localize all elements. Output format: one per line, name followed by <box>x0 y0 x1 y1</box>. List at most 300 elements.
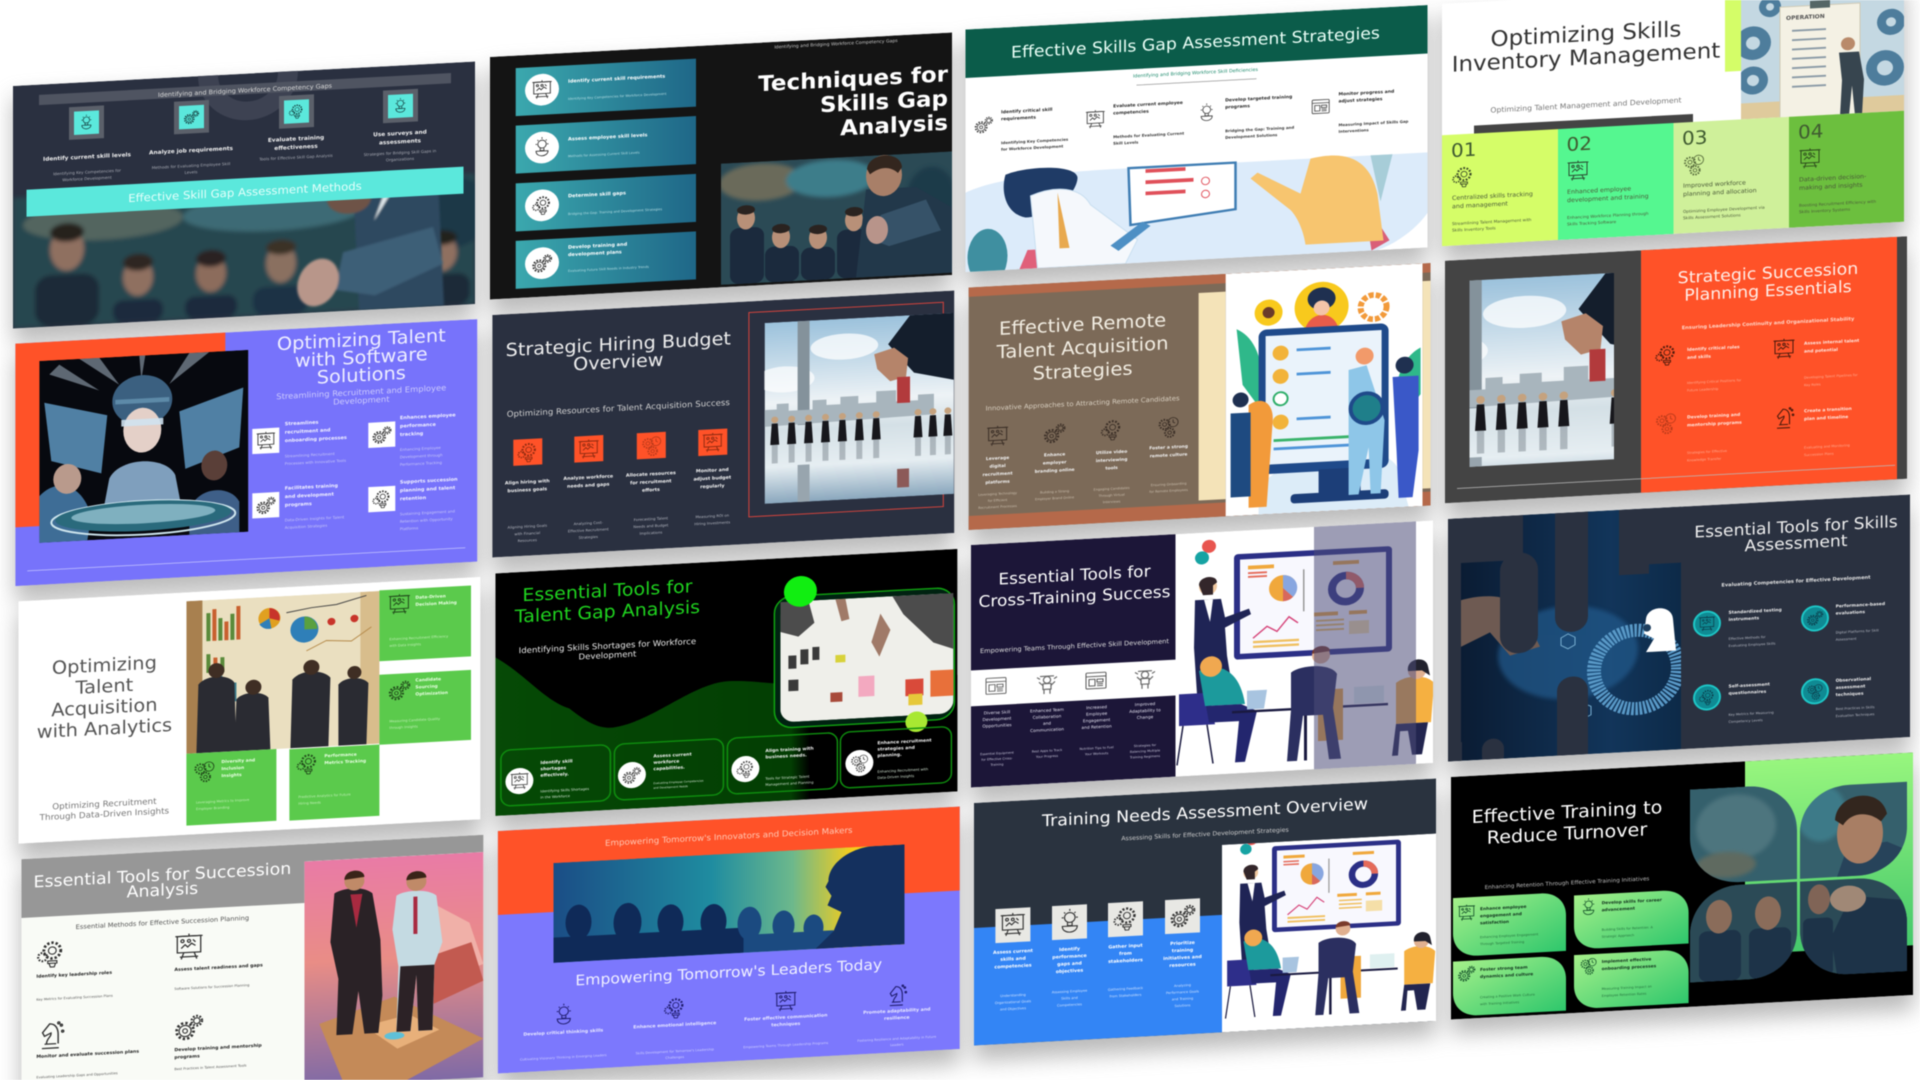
title: Techniques for <box>758 62 948 97</box>
four technique cards: Identify current skill requirements <box>568 74 665 85</box>
four capability items: Supports succession <box>400 478 458 486</box>
translucent overlay panel <box>1314 521 1416 769</box>
four capability cards: shortages <box>540 765 567 772</box>
four method items: Software Solutions for Succession Planning <box>174 983 249 991</box>
four leadership items: Foster effective communication <box>744 1013 827 1023</box>
green capability panels: Leveraging Metrics to Improve <box>196 798 249 805</box>
four strategy columns: Leverage <box>986 456 1009 462</box>
slide: Effective Remote Talent Acquisition Strategies <box>969 263 1431 530</box>
slide: Effective Training to Reduce Turnover <box>1451 753 1913 1020</box>
title: Talent Acquisition <box>996 333 1169 363</box>
four budget steps: Monitor and <box>696 468 729 474</box>
four strategy columns: Employer Brand Online <box>1035 495 1074 501</box>
title: Optimizing <box>52 653 157 679</box>
four strategy items: Skill Levels <box>1113 140 1139 146</box>
four method cards: assessments <box>379 138 422 146</box>
title: Strategic Hiring Budget <box>506 329 731 361</box>
four assessment steps: skills and <box>1000 956 1026 963</box>
title: Skills Gap <box>820 86 948 118</box>
four capability items: Retention with Opportunity <box>400 517 454 524</box>
slide: Strategic Succession Planning Essentials <box>1414 236 1907 506</box>
four strategy columns: Building a Strong <box>1040 489 1069 495</box>
title: Strategies <box>1033 358 1133 385</box>
four capability items <box>252 412 458 539</box>
subtitle: Ensuring Leadership Continuity and Organizational Stability <box>1682 316 1855 331</box>
slide: Optimizing Talent Acquisition with Analytics <box>18 577 480 844</box>
four leadership items <box>520 983 936 1068</box>
four strategy columns: Ensuring Onboarding <box>1151 482 1186 487</box>
four assessment steps: stakeholders <box>1108 957 1143 965</box>
four succession items: Key Roles <box>1804 382 1821 387</box>
image: leader silhouette with crowd <box>552 844 906 964</box>
slide: Essential Tools for Cross-Training Success <box>971 520 1434 788</box>
subtitle: Identifying and Bridging Workforce Skill Deficiencies <box>1133 67 1259 79</box>
four technique cards: development plans <box>568 249 622 258</box>
four capability cards: in the Workforce <box>540 794 570 800</box>
four budget steps <box>505 428 732 544</box>
title: Assessment <box>1744 531 1848 555</box>
subtitle: Essential Methods for Effective Succession Planning <box>76 914 249 931</box>
four numbered benefit cards: Optimizing Employee Development via <box>1683 205 1765 214</box>
four method cards: Evaluate training <box>268 135 324 144</box>
four benefit columns: and Retention <box>1082 724 1112 730</box>
illustration: team presentation <box>1177 528 1434 767</box>
subtitle band <box>39 73 451 105</box>
four capability cards: Evaluating Employee Competencies <box>653 779 703 785</box>
four leadership items: Fostering Resilience and Adaptability in Future <box>857 1035 936 1043</box>
slide: Strategic Hiring Budget Overview <box>492 291 954 558</box>
four leadership items: Develop critical thinking skills <box>523 1028 604 1038</box>
four benefit columns: for Effective Cross- <box>981 756 1013 762</box>
four numbered benefit cards: Streamlining Talent Management with <box>1452 217 1531 226</box>
green capability panels: Metrics Tracking <box>324 758 366 766</box>
four budget steps: Analyzing Cost- <box>574 521 603 526</box>
four assessment steps <box>993 898 1202 1018</box>
four capability items: tracking <box>400 431 424 438</box>
four capability items: and development <box>285 492 335 500</box>
subtitle: Optimizing Talent Management and Development <box>1490 96 1682 115</box>
subtitle: Development <box>333 394 390 407</box>
four succession items: Knowledge Transfer <box>1687 457 1722 462</box>
green capability panels: Data-Driven <box>415 594 446 601</box>
four capability cards <box>501 726 951 806</box>
four initiative cards: Through Targeted Training <box>1479 940 1524 946</box>
four assessment tools: Evaluating Employee Skills <box>1728 642 1776 648</box>
four capability items: performance <box>400 422 437 430</box>
four capability items: Enhancing Employee <box>400 446 441 452</box>
four budget steps: regularly <box>700 483 724 490</box>
illustration: team presentation <box>1221 832 1437 1033</box>
four succession items: Succession Plans <box>1804 452 1834 457</box>
four assessment steps: Organizational Goals <box>995 999 1031 1005</box>
four benefit columns: Diverse Skill <box>984 709 1010 716</box>
four assessment steps: Skills and <box>1061 996 1078 1001</box>
four assessment steps: objectives <box>1056 968 1084 975</box>
title: Empowering Tomorrow's Leaders Today <box>575 956 882 989</box>
slide: Essential Tools for Talent Gap Analysis <box>495 549 957 816</box>
dark accent bar <box>1474 114 1693 134</box>
four initiative cards: Measuring Training Impact on <box>1602 985 1652 991</box>
four leadership items: Empowering Teams Through Leadership Programs <box>743 1041 829 1049</box>
four strategy columns: recruitment <box>983 471 1013 478</box>
four budget steps: business goals <box>507 486 547 494</box>
four leadership items: Skills Development for Tomorrow's Leadership <box>636 1047 714 1055</box>
four succession items: Assess internal talent <box>1804 339 1859 347</box>
four capability cards: effectively. <box>540 771 569 779</box>
four budget steps: Needs and Budget <box>633 523 669 529</box>
four benefit columns: Improved <box>1135 701 1155 707</box>
slide: Optimizing Skills Inventory Management <box>1442 0 1905 246</box>
green capability panels: Performance <box>324 753 357 759</box>
four capability cards: Identifying Skills Shortages <box>540 787 589 793</box>
four numbered benefit cards: 01 <box>1451 138 1476 162</box>
four strategy items: adjust strategies <box>1338 96 1383 104</box>
four capability items: Data-Driven Insights for Talent <box>285 515 344 522</box>
green capability panels: Measuring Candidate Quality <box>389 717 440 723</box>
photo: analysts reviewing wall charts <box>186 590 380 754</box>
four benefit columns: and <box>1043 721 1051 726</box>
four assessment tools: Evaluation Techniques <box>1836 712 1875 718</box>
four initiative cards: Building Skills for Retention: A <box>1602 925 1653 932</box>
four strategy columns: branding online <box>1035 467 1075 475</box>
four assessment tools: Competency Levels <box>1728 718 1763 724</box>
title: Overview <box>573 350 663 375</box>
four capability cards: Assess current <box>653 753 692 759</box>
four benefit columns: Communication <box>1030 726 1064 733</box>
title: Solutions <box>317 363 406 388</box>
four strategy columns: for Efficient <box>988 498 1008 503</box>
four method items: Identify key leadership roles <box>36 970 112 980</box>
four method cards: Organizations <box>386 156 414 162</box>
four method cards: Identify current skill levels <box>43 152 132 163</box>
title: Essential Tools for Skills <box>1694 512 1898 542</box>
four capability items: Performance Tracking <box>400 461 443 467</box>
four initiative cards: Creating a Positive Work Culture <box>1480 993 1535 999</box>
four assessment steps: initiatives and <box>1163 954 1202 962</box>
four assessment steps: and Objectives <box>1000 1006 1026 1012</box>
four assessment tools: Effective Methods for <box>1728 635 1766 641</box>
title: Essential Tools for <box>522 577 692 606</box>
four strategy items: Measuring Impact of Skills Gap <box>1338 119 1408 127</box>
title: Reduce Turnover <box>1487 820 1648 849</box>
four assessment tools: techniques <box>1836 691 1864 698</box>
four assessment steps: Competencies <box>1057 1002 1082 1008</box>
four assessment steps: Gathering Feedback <box>1108 986 1143 992</box>
four assessment steps: Assessing Employee <box>1052 989 1087 994</box>
accent strip <box>1725 0 1741 72</box>
four method items: Key Metrics for Evaluating Succession Plans <box>36 994 113 1002</box>
four capability cards: planning. <box>877 752 902 759</box>
four capability cards: Enhance recruitment <box>877 739 932 746</box>
four succession items: Develop training and <box>1687 413 1740 420</box>
four strategy items: competencies <box>1113 109 1149 116</box>
slide: Essential Tools for Skills Assessment <box>1448 476 1910 776</box>
photo: woman with futuristic helmet and screens <box>38 349 249 544</box>
four benefit columns: Balancing Multiple <box>1130 748 1160 754</box>
four leadership items: Leaders <box>890 1043 904 1047</box>
four assessment tools: evaluations <box>1836 609 1865 617</box>
four budget steps: with Financial <box>514 531 540 536</box>
title: Planning Essentials <box>1684 276 1852 305</box>
four initiative cards: advancement <box>1602 906 1635 913</box>
title band: Effective Skill Gap Assessment Methods <box>128 179 362 205</box>
four strategy items: for Workforce Development <box>1001 144 1063 152</box>
four capability cards: strategies and <box>877 745 915 753</box>
photo: operation checklist with gears: OPERATION <box>1786 14 1825 22</box>
four assessment steps: Gather input <box>1108 944 1143 950</box>
four numbered benefit cards: planning and allocation <box>1683 187 1757 198</box>
four assessment steps: performance <box>1052 953 1087 961</box>
four assessment tools: Standardized testing <box>1728 608 1782 616</box>
four numbered benefit cards: development and training <box>1567 193 1649 204</box>
four strategy columns <box>978 416 1188 511</box>
four numbered benefit cards: Enhancing Workforce Planning through <box>1567 211 1648 220</box>
four budget steps: Strategies <box>579 535 598 540</box>
four strategy columns: Enhance <box>1044 452 1065 458</box>
four benefit columns: Training Regimens <box>1129 754 1160 760</box>
subtitle: Streamlining Recruitment and Employee <box>276 383 446 401</box>
four capability items: recruitment and <box>285 427 331 436</box>
four budget steps: Allocate resources <box>626 471 676 479</box>
four strategy items: programs <box>1225 103 1250 110</box>
four assessment steps: Prioritize <box>1170 941 1195 947</box>
subtitle: Identifying Skills Shortages for Workforce <box>519 636 696 655</box>
four capability cards: Management and Planning <box>765 780 813 787</box>
four succession items: Identifying Critical Positions for <box>1687 378 1741 385</box>
four succession items: and potential <box>1804 347 1838 355</box>
green capability panels: Predictive Analytics for Future <box>298 793 351 799</box>
four budget steps: Hiring Investments <box>694 521 730 526</box>
four numbered benefit cards: Boosting Recruitment Efficiency with <box>1799 199 1876 208</box>
four budget steps: efforts <box>642 487 660 494</box>
four method cards: Levels <box>185 169 197 175</box>
four strategy items: requirements <box>1001 115 1036 122</box>
four strategy columns: Engaging Candidates <box>1094 486 1130 492</box>
four benefit columns: Development <box>983 716 1012 722</box>
four leadership items: techniques <box>771 1021 801 1028</box>
four succession items: Create a transition <box>1804 407 1852 414</box>
four leadership items: Cultivating Visionary Thinking in Emerging Leaders <box>520 1053 607 1062</box>
four numbered benefit cards: making and insights <box>1799 182 1863 192</box>
four strategy items: Identify critical skill <box>1001 108 1053 115</box>
title: Training Needs Assessment Overview <box>1041 794 1368 830</box>
four succession items: Future Leadership <box>1687 387 1718 392</box>
gray title header: Analysis <box>127 878 198 901</box>
four budget steps: Aligning Hiring Goals <box>508 524 547 530</box>
four strategy columns: Interviews <box>1103 499 1121 504</box>
four assessment steps: Analyzing <box>1174 983 1191 988</box>
four strategy columns: for Remote Employees <box>1149 488 1188 494</box>
title: Cross-Training Success <box>979 582 1170 611</box>
title: with Analytics <box>37 716 172 743</box>
four method cards: Tools for Effective Skill Gap Analysis <box>258 153 333 162</box>
title: Optimizing Skills <box>1491 17 1681 52</box>
four initiative cards: satisfaction <box>1480 919 1509 926</box>
subtitle band: Identifying and Bridging Workforce Competency Gaps <box>158 83 332 99</box>
green capability panels: Decision Making <box>415 600 457 608</box>
four capability items: Acquisition Strategies <box>285 524 327 530</box>
four assessment tools: Observational <box>1836 677 1871 684</box>
gray title header: Essential Tools for Succession <box>33 858 291 891</box>
subtitle: Optimizing Recruitment <box>52 797 157 812</box>
four assessment tools: Digital Platforms for Skill <box>1836 629 1879 635</box>
four technique cards <box>516 59 696 289</box>
four capability items: retention <box>400 495 427 502</box>
four succession items: Evaluating and Monitoring <box>1804 443 1850 450</box>
four succession items: mentorship programs <box>1687 420 1742 428</box>
four capability items: Sustaining Engagement and <box>400 510 455 516</box>
four method items: Monitor and evaluate succession plans <box>36 1049 139 1060</box>
four technique cards: Develop training and <box>568 243 627 251</box>
four assessment steps: resources <box>1169 962 1196 969</box>
photo: operation checklist with gears <box>1740 0 1905 120</box>
four method cards: Methods for Evaluating Employee Skill <box>152 161 230 170</box>
four capability items: programs <box>285 501 312 508</box>
four strategy columns: employer <box>1043 459 1067 466</box>
title: Effective Remote <box>999 310 1166 340</box>
four numbered benefit cards: 03 <box>1682 126 1707 150</box>
four assessment steps: gaps and <box>1057 961 1082 968</box>
four method items: Best Practices in Talent Assessment Tools <box>174 1064 247 1071</box>
four assessment tools: questionnaires <box>1728 689 1767 697</box>
red photo frame <box>749 302 943 517</box>
four strategy columns: tools <box>1105 465 1118 472</box>
four method items: Evaluating Leadership Gaps and Opportunities <box>36 1071 118 1079</box>
four method cards: Workforce Development <box>62 175 112 182</box>
four capability items: Processes with Innovative Tools <box>285 459 346 466</box>
green capability panels: Insights <box>221 772 242 779</box>
four initiative cards: dynamics and culture <box>1480 971 1533 980</box>
four capability items: Streamlines <box>285 421 319 427</box>
four succession items: Identify critical roles <box>1687 345 1740 353</box>
photo: team with pointing man <box>720 151 952 286</box>
four succession items: Developing Talent Pipelines for <box>1804 373 1858 380</box>
four leadership items: Promote adaptability and <box>863 1008 931 1016</box>
photo: hand moving a chess piece <box>764 312 955 504</box>
slide: Optimizing Talent with Software Solutions <box>15 319 477 586</box>
four benefit columns: Nutrition Tips to Fuel <box>1079 745 1114 751</box>
subtitle: Innovative Approaches to Attracting Remote Candidates <box>986 395 1180 413</box>
four assessment steps: Identify <box>1059 947 1080 953</box>
four capability cards: capabilities. <box>653 765 685 772</box>
four method cards: Use surveys and <box>373 130 427 138</box>
photo: hand touching digital interface through pill masks <box>1448 506 1682 762</box>
four benefit columns: Strategies for <box>1134 743 1156 748</box>
subtitle: Development <box>578 649 637 661</box>
four capability items: Platforms <box>400 526 418 531</box>
title: Optimizing Talent <box>277 326 446 355</box>
four budget steps: for recruitment <box>630 478 672 486</box>
four leadership items: Challenges <box>665 1055 684 1060</box>
four benefit columns: Engagement <box>1083 717 1111 723</box>
green capability panels: Diversity and <box>221 758 255 765</box>
four initiative cards: Develop skills for career <box>1602 898 1662 906</box>
four assessment tools: assessment <box>1836 684 1865 691</box>
four budget steps: Effective Recruitment <box>568 527 609 533</box>
four numbered benefit cards: Centralized skills tracking <box>1452 191 1533 202</box>
four benefit columns: Increased <box>1086 704 1107 710</box>
title: Analysis <box>840 110 948 141</box>
four initiative cards: engagement and <box>1480 911 1522 919</box>
subtitle: Identifying and Bridging Workforce Competency Gaps <box>774 38 898 50</box>
four strategy items: Evaluate current employee <box>1113 101 1183 109</box>
four succession items: and skills <box>1687 354 1711 361</box>
four capability items: planning and talent <box>400 485 456 494</box>
photo: hand moving a chess piece <box>1468 272 1615 468</box>
slide: Effective Skills Gap Assessment Strategies <box>966 5 1428 286</box>
four budget steps: Resources <box>518 538 537 543</box>
title: with Software <box>295 345 428 372</box>
four benefit columns: Adaptability to <box>1129 707 1161 714</box>
title: Essential Tools for <box>998 562 1151 588</box>
four strategy columns: platforms <box>985 479 1010 486</box>
four capability items: Enhances employee <box>400 413 456 421</box>
four numbered benefit cards: Data-driven decision- <box>1799 173 1866 184</box>
four initiative cards: Enhance employee <box>1480 905 1527 912</box>
illustration: two people reviewing a checklist board <box>965 152 1428 272</box>
four initiative cards: Employee Retention Rates <box>1602 992 1647 998</box>
subtitle: Optimizing Resources for Talent Acquisition Success <box>507 397 730 419</box>
four benefit columns: Your Workouts <box>1085 751 1109 756</box>
four assessment tools: instruments <box>1728 615 1760 623</box>
four numbered benefit cards: Improved workforce <box>1683 180 1746 190</box>
four leadership items: Enhance emotional intelligence <box>633 1020 716 1030</box>
four benefit columns: Your Progress <box>1036 754 1058 759</box>
four capability cards: Identify skill <box>540 759 573 766</box>
green capability panels: Enhancing Recruitment Efficiency <box>389 634 448 641</box>
four assessment tools: Performance-based <box>1836 602 1885 610</box>
four budget steps: Forecasting Talent <box>634 516 668 522</box>
four benefit columns: Opportunities <box>982 722 1012 729</box>
photo: foreground man suit and hand <box>296 195 445 310</box>
four benefit columns: Employee <box>1086 711 1108 717</box>
four strategy items: Methods for Evaluating Current <box>1113 131 1184 139</box>
green capability panels: Candidate <box>415 677 441 683</box>
title header: Effective Skills Gap Assessment Strategies <box>1011 23 1380 62</box>
four capability items: onboarding processes <box>285 435 347 444</box>
four strategy items: Development Solutions <box>1225 132 1278 140</box>
four strategy columns: Leveraging Technology <box>978 491 1017 497</box>
four technique cards: Identifying Key Competencies for Workforce Development <box>568 92 667 101</box>
subtitle: Assessing Skills for Effective Development Strategies <box>1121 827 1289 842</box>
green capability panels: through Insights <box>389 725 418 730</box>
four benefit columns: Best Apps to Track <box>1032 748 1062 754</box>
four strategy columns: Recruitment Processes <box>978 504 1017 510</box>
four numbered benefit cards: 04 <box>1798 120 1823 144</box>
gray title header <box>21 835 483 918</box>
four assessment steps: Understanding <box>1000 993 1026 998</box>
title header <box>966 5 1428 78</box>
four technique cards: Methods for Assessing Current Skill Levels <box>568 151 640 158</box>
slide: Empowering Tomorrow's Leaders Today <box>498 807 960 1074</box>
four benefit columns: Change <box>1137 714 1154 720</box>
four technique cards: Evaluating Future Skill Needs in Industry Trends <box>568 265 649 273</box>
four strategy columns: Utilize video <box>1096 450 1127 456</box>
subtitle: Evaluating Competencies for Effective Development <box>1721 575 1871 589</box>
four budget steps: adjust budget <box>693 475 732 483</box>
subtitle <box>1133 67 1259 86</box>
four strategy items: Monitor progress and <box>1338 90 1394 97</box>
green capability panels: with Data Insights <box>389 642 421 648</box>
photo: two businessmen over a model house <box>304 852 484 1080</box>
four budget steps: Measuring ROI on <box>696 514 729 519</box>
four capability items: Development through <box>400 453 443 459</box>
four budget steps: needs and gaps <box>567 482 610 490</box>
four method cards: Analyze job requirements <box>149 146 234 156</box>
four assessment steps: Assess current <box>993 949 1033 956</box>
four assessment steps: from Stakeholders <box>1110 993 1142 998</box>
four assessment steps: training <box>1172 947 1193 954</box>
